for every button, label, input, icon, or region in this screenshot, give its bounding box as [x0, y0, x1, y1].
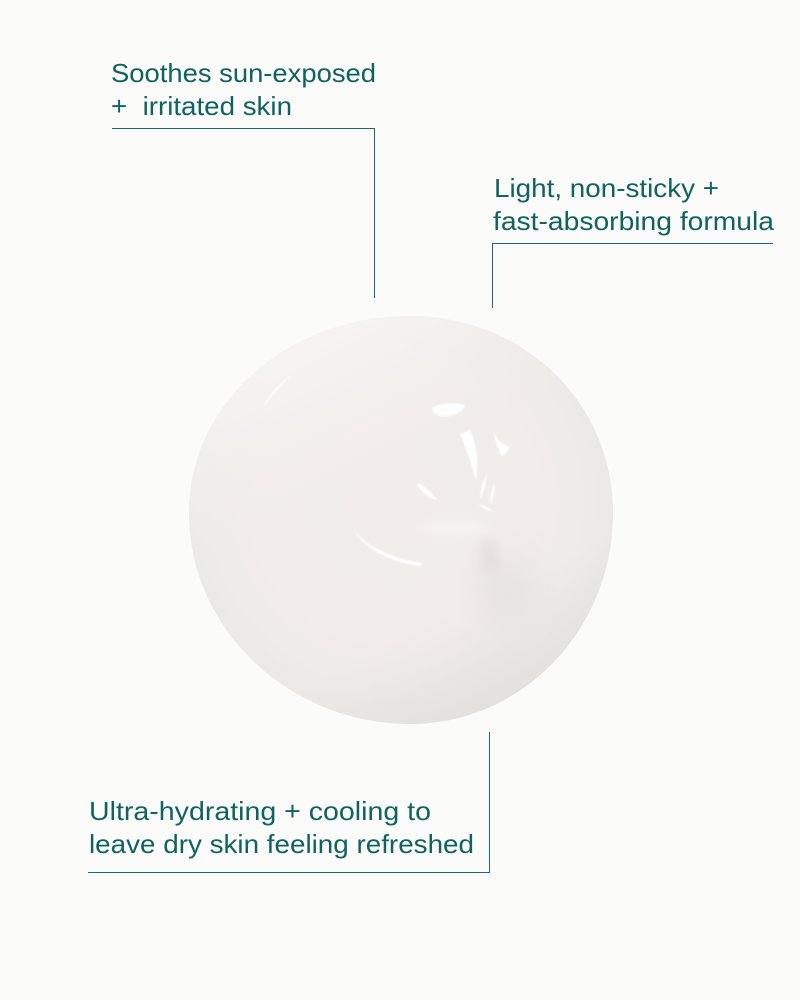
- callout text: soothes: Soothes sun-exposed: [111, 58, 376, 88]
- callout text: soothes: + irritated skin: [111, 91, 292, 121]
- callout text: ultra-hydrating: leave dry skin feeling refreshed: [89, 829, 474, 859]
- callout text: light formula: [493, 173, 775, 236]
- callout: ultra-hydrating: [88, 732, 490, 872]
- callout: light formula: [492, 173, 775, 308]
- callout text: soothes: [111, 58, 376, 121]
- leader line: soothes: [112, 128, 374, 298]
- leader line: light formula: [492, 244, 773, 308]
- callout text: ultra-hydrating: Ultra-hydrating + cooling to: [89, 796, 431, 826]
- callout text: light formula: Light, non-sticky +: [494, 173, 719, 203]
- callout text: light formula: fast-absorbing formula: [493, 206, 775, 236]
- callout text: ultra-hydrating: [89, 796, 474, 859]
- gloss highlights: [263, 375, 510, 566]
- leader line: ultra-hydrating: [88, 732, 490, 872]
- cream swatch: [189, 316, 613, 724]
- callout: soothes skin: [111, 58, 376, 298]
